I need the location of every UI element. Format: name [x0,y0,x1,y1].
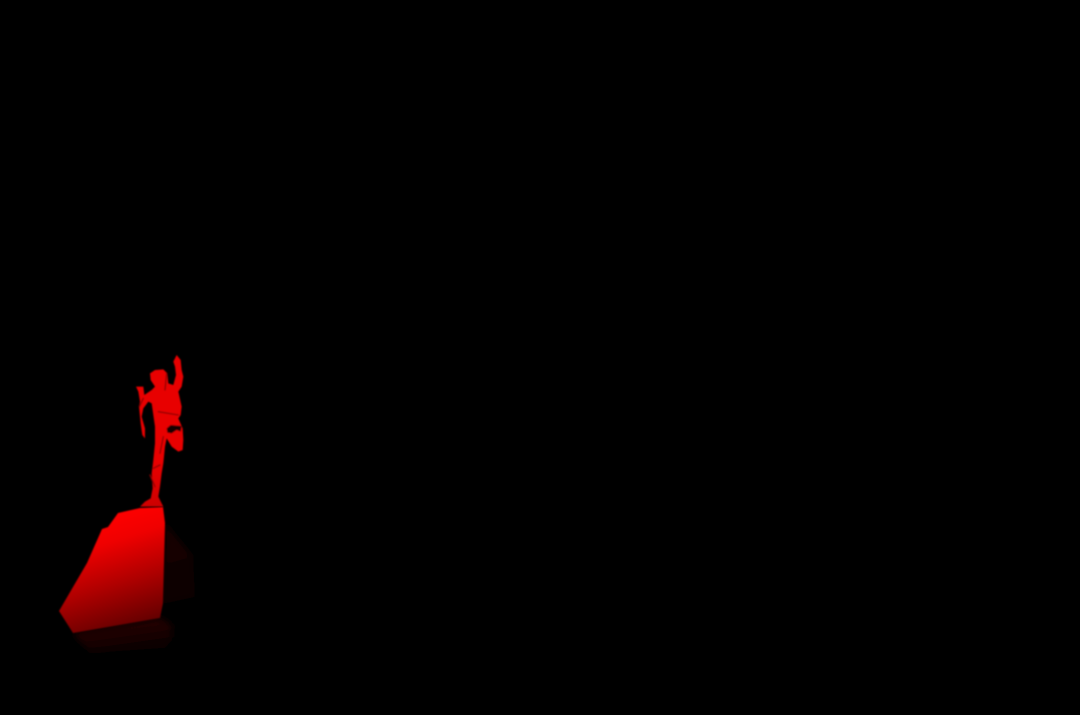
pedestal: lit face [59,507,165,633]
pedestal: dim right face [163,523,195,604]
statue: shadow behind bent leg [167,425,182,433]
statue: surface shading [139,373,178,487]
statue: winged figure [136,355,183,507]
pedestal: dim lower band [73,618,172,653]
